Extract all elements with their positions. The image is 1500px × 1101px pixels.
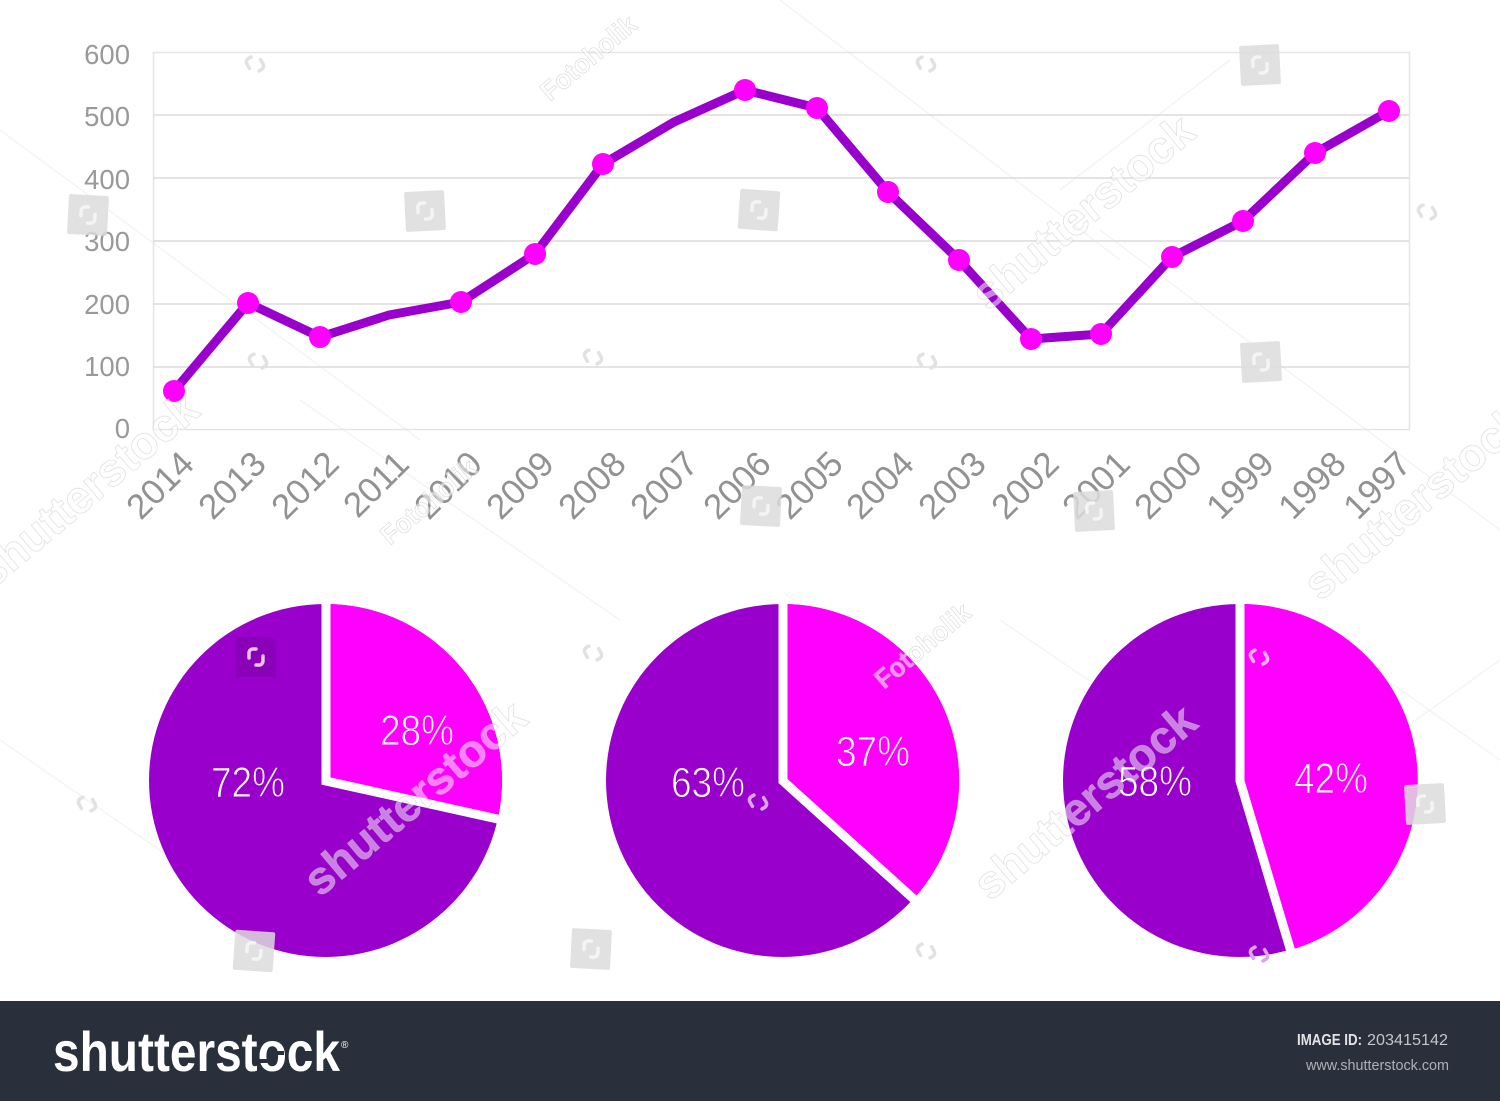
x axis labels: 1999: [1199, 444, 1282, 527]
watermark: contributor name: Fotoholik: [375, 452, 483, 551]
x axis labels: [119, 444, 1419, 527]
x axis labels: 2000: [1127, 444, 1210, 527]
x axis labels: 2009: [479, 444, 562, 527]
pie chart: 72 / 28: 28%: [380, 707, 454, 755]
line chart: [163, 79, 1400, 402]
x axis labels: 2007: [623, 444, 706, 527]
footer bar: [0, 1001, 1500, 1101]
pie chart: 63 / 37: [606, 600, 959, 957]
watermark: logotype: shutterstock: [293, 689, 537, 906]
watermark: small marks: [77, 54, 1437, 964]
x axis labels: 2002: [984, 444, 1067, 527]
watermark: contributor name: [375, 8, 977, 695]
logo mark gaps: [256, 1051, 284, 1063]
x axis labels: 2014: [119, 444, 202, 527]
x axis labels: 2003: [911, 444, 994, 527]
x axis labels: 2001: [1055, 444, 1138, 527]
watermark: logotype: shutterstock: [961, 103, 1205, 320]
y axis labels: 300: [84, 226, 130, 257]
website: www.shutterstock.com: [1305, 1057, 1449, 1074]
pie chart: 63 / 37: 37%: [836, 728, 910, 776]
registered mark: ®: [341, 1040, 349, 1051]
x axis labels: 1998: [1271, 444, 1354, 527]
x axis labels: 1997: [1336, 444, 1419, 527]
x axis labels: 2010: [407, 444, 490, 527]
pie chart: 58 / 42: 58%: [1118, 758, 1192, 806]
watermark: contributor name: Fotoholik: [535, 8, 643, 107]
pie chart: 58 / 42: 42%: [1294, 755, 1368, 803]
x axis labels: 2013: [191, 444, 274, 527]
y axis labels: 100: [84, 351, 130, 382]
x axis labels: 2004: [839, 444, 922, 527]
pie chart: 63 / 37: 63%: [671, 759, 745, 807]
watermark: contributor name: Fotoholik: [869, 596, 977, 695]
pie chart: 72 / 28: [149, 600, 502, 957]
y axis labels: 0: [115, 413, 130, 444]
watermark: logotype: shutterstock: [963, 693, 1207, 910]
y axis labels: 400: [84, 164, 130, 195]
y axis labels: 200: [84, 289, 130, 320]
image id label: IMAGE ID:: [1297, 1032, 1362, 1049]
pie chart: 58 / 42: [1063, 600, 1418, 957]
y axis labels: [84, 39, 130, 444]
footer logo: shutterstock: [53, 1020, 341, 1083]
pie chart: 72 / 28: 72%: [211, 759, 285, 807]
x axis labels: 2006: [696, 444, 779, 527]
image id number: 203415142: [1367, 1032, 1448, 1049]
x axis labels: 2012: [264, 444, 347, 527]
watermark: logotype: [0, 103, 1500, 910]
x axis labels: 2005: [768, 444, 851, 527]
x axis labels: 2011: [336, 444, 417, 525]
x axis labels: 2008: [551, 444, 634, 527]
y axis labels: 500: [84, 101, 130, 132]
y axis labels: 600: [84, 39, 130, 70]
watermark: badges: [67, 44, 1446, 972]
